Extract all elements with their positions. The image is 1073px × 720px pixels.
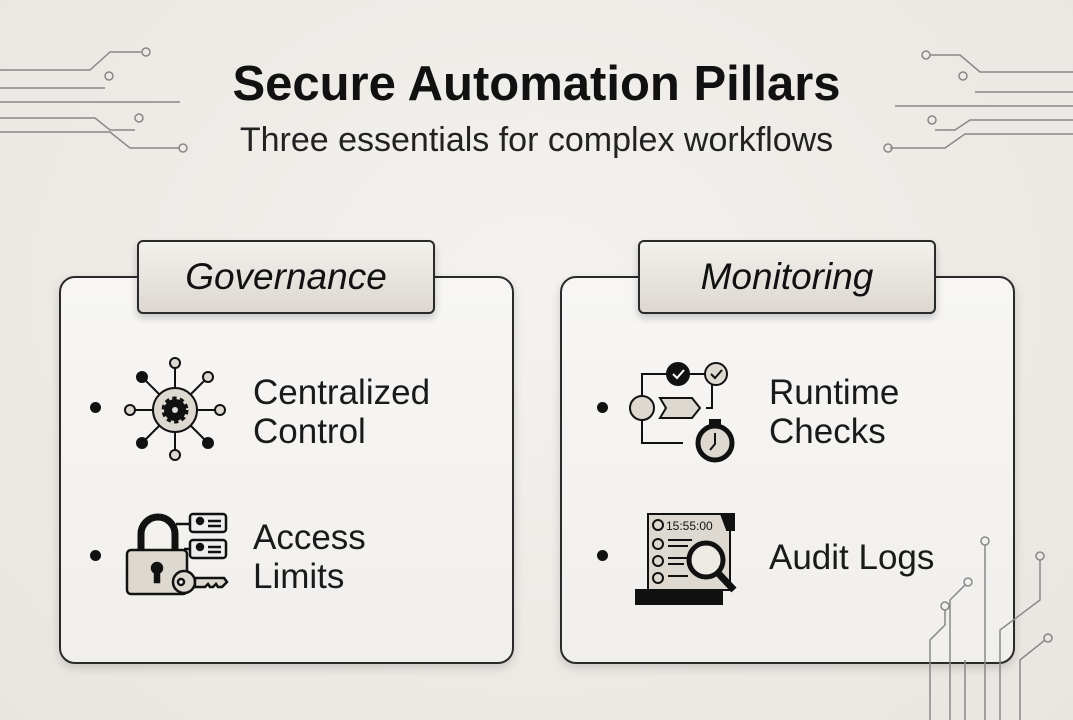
label: access limits: Access bbox=[253, 518, 366, 557]
label: centralized control: Centralized bbox=[253, 373, 430, 412]
panel: governance bbox=[59, 276, 514, 664]
title: Secure Automation Pillars bbox=[232, 57, 841, 111]
icon: runtime checks bbox=[629, 362, 734, 462]
label: runtime checks: Runtime bbox=[769, 373, 899, 412]
subtitle: Three essentials for complex workflows bbox=[240, 121, 833, 159]
label: audit logs: Audit Logs bbox=[769, 538, 934, 577]
label: runtime checks bbox=[769, 373, 899, 451]
label: access limits bbox=[253, 518, 366, 596]
bullets bbox=[90, 402, 608, 561]
icon: access limits bbox=[126, 512, 229, 596]
label: runtime checks: Checks bbox=[769, 412, 886, 451]
tab: governance: Governance bbox=[185, 256, 387, 297]
label: access limits: Limits bbox=[253, 557, 344, 596]
icon: audit logs bbox=[635, 513, 736, 605]
tab: governance bbox=[137, 240, 435, 314]
panel: monitoring bbox=[560, 276, 1015, 664]
tab: monitoring: Monitoring bbox=[701, 256, 873, 297]
label: centralized control: Control bbox=[253, 412, 366, 451]
icon: audit logs: 15:55:00 bbox=[666, 519, 713, 533]
label: centralized control bbox=[253, 373, 430, 451]
icon: centralized control bbox=[124, 357, 226, 461]
tab: monitoring bbox=[638, 240, 936, 314]
